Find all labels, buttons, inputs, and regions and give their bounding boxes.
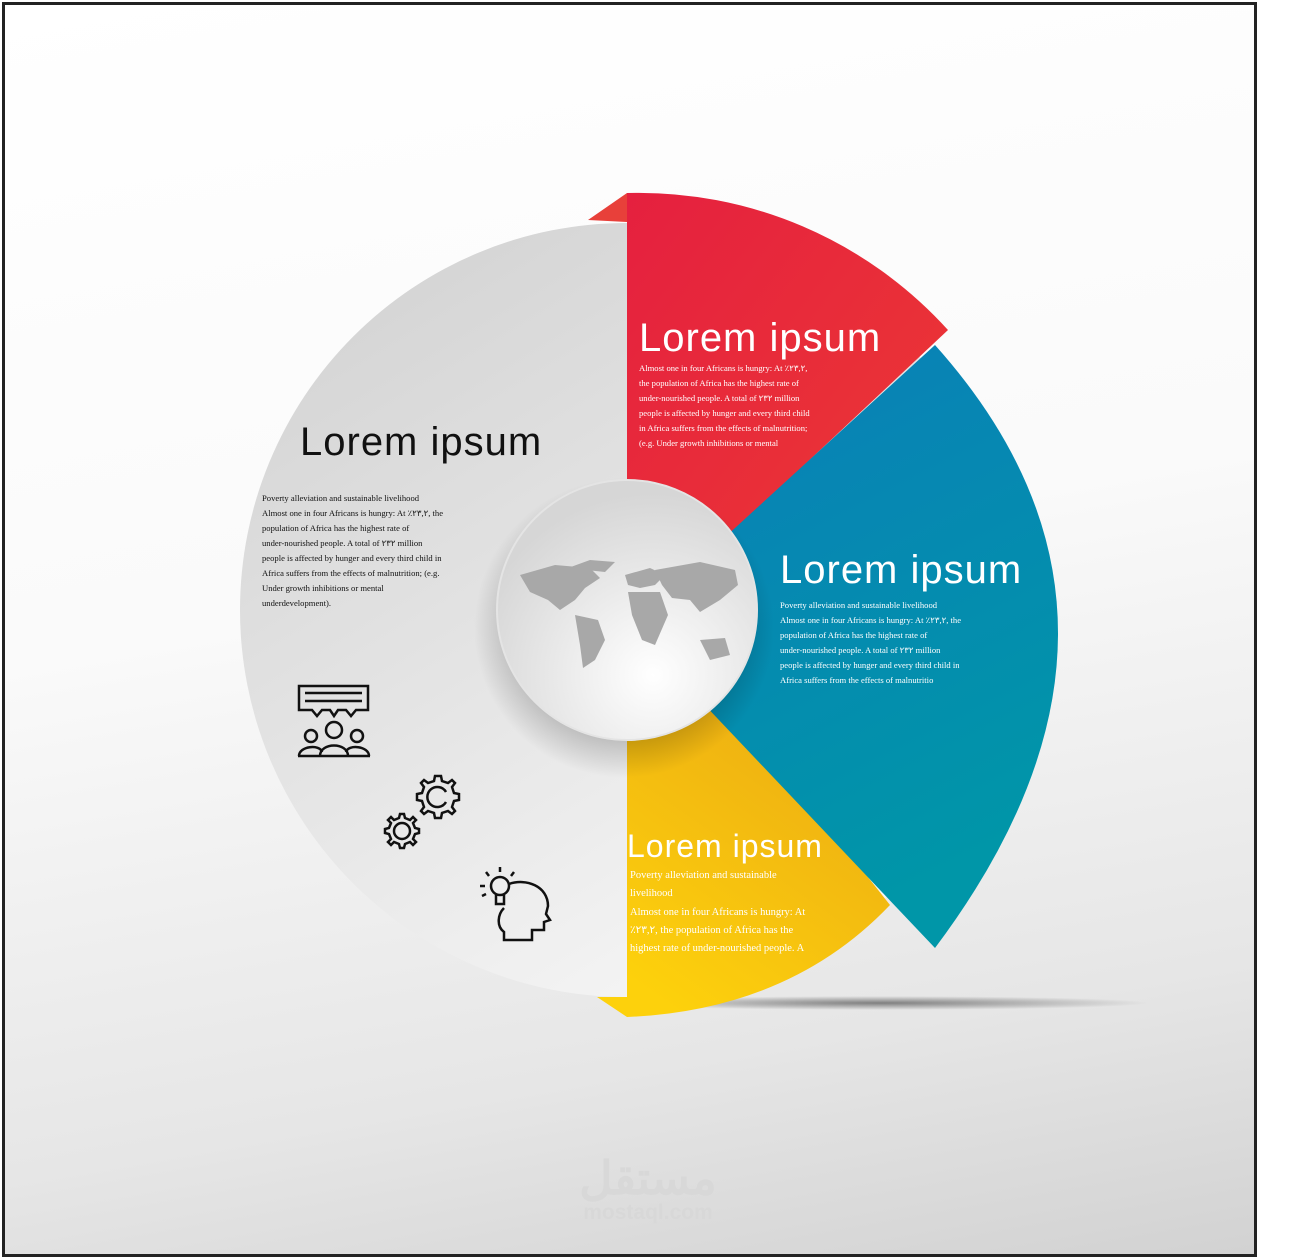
text block: gray panel <box>262 493 443 608</box>
heading: gray panel: Lorem ipsum <box>300 420 542 464</box>
text block: blue panel: Poverty alleviation and sustainable livelihood <box>780 600 937 610</box>
heading: blue panel: Lorem ipsum <box>780 548 1022 592</box>
text block: blue panel: under-nourished people. A total of ۲۳۲ million <box>780 645 940 655</box>
text block: red panel: under-nourished people. A total of ۲۳۲ million <box>639 393 799 403</box>
shadow under chart <box>610 996 1150 1010</box>
text block: gray panel: Under growth inhibitions or mental <box>262 583 384 593</box>
panel: red sector <box>588 193 948 610</box>
watermark: مستقل <box>579 1142 717 1208</box>
icon: head with lightbulb <box>480 867 552 942</box>
text block: gray panel: underdevelopment). <box>262 598 331 608</box>
text block: red panel: in Africa suffers from the effects of malnutrition; <box>639 423 807 433</box>
text block: blue panel <box>780 600 961 685</box>
icon: gears <box>384 774 460 850</box>
panel: gray half circle <box>240 223 1014 997</box>
text block: red panel: Almost one in four Africans is hungry: At ٪۲۳,۲, <box>639 363 807 373</box>
text block: gray panel: Almost one in four Africans is hungry: At ٪۲۳,۲, the <box>262 508 443 518</box>
text block: blue panel: population of Africa has the highest rate of <box>780 630 927 640</box>
icon: world map <box>520 560 738 668</box>
heading: yellow panel: Lorem ipsum <box>627 828 823 864</box>
text block: yellow panel: highest rate of under-nourished people. A <box>630 943 804 954</box>
text block: gray panel: under-nourished people. A total of ۲۳۲ million <box>262 538 422 548</box>
text block: yellow panel: livelihood <box>630 888 673 899</box>
watermark: mostaql.com <box>583 1201 713 1224</box>
text block: red panel: people is affected by hunger and every third child <box>639 408 810 418</box>
icon: meeting <box>298 684 370 758</box>
text block: gray panel: Poverty alleviation and sustainable livelihood <box>262 493 419 503</box>
text block: red panel <box>639 363 810 448</box>
text block: yellow panel: ٪۲۳,۲, the population of Africa has the <box>630 925 793 936</box>
text block: yellow panel <box>630 870 806 954</box>
text block: yellow panel: Poverty alleviation and sustainable <box>630 870 777 881</box>
panel: yellow sector <box>597 610 890 1017</box>
heading: red panel: Lorem ipsum <box>639 316 881 360</box>
text block: blue panel: Africa suffers from the effects of malnutritio <box>780 675 933 685</box>
text block: gray panel: people is affected by hunger and every third child in <box>262 553 442 563</box>
text block: gray panel: population of Africa has the highest rate of <box>262 523 409 533</box>
center globe <box>474 478 774 778</box>
text block: gray panel: Africa suffers from the effects of malnutrition; (e.g. <box>262 568 439 578</box>
text block: red panel: the population of Africa has the highest rate of <box>639 378 799 388</box>
panel: blue sector <box>700 345 1058 948</box>
text block: blue panel: people is affected by hunger and every third child in <box>780 660 960 670</box>
text block: blue panel: Almost one in four Africans is hungry: At ٪۲۳,۲, the <box>780 615 961 625</box>
text block: red panel: (e.g. Under growth inhibitions or mental <box>639 438 778 448</box>
text block: yellow panel: Almost one in four Africans is hungry: At <box>630 907 805 918</box>
